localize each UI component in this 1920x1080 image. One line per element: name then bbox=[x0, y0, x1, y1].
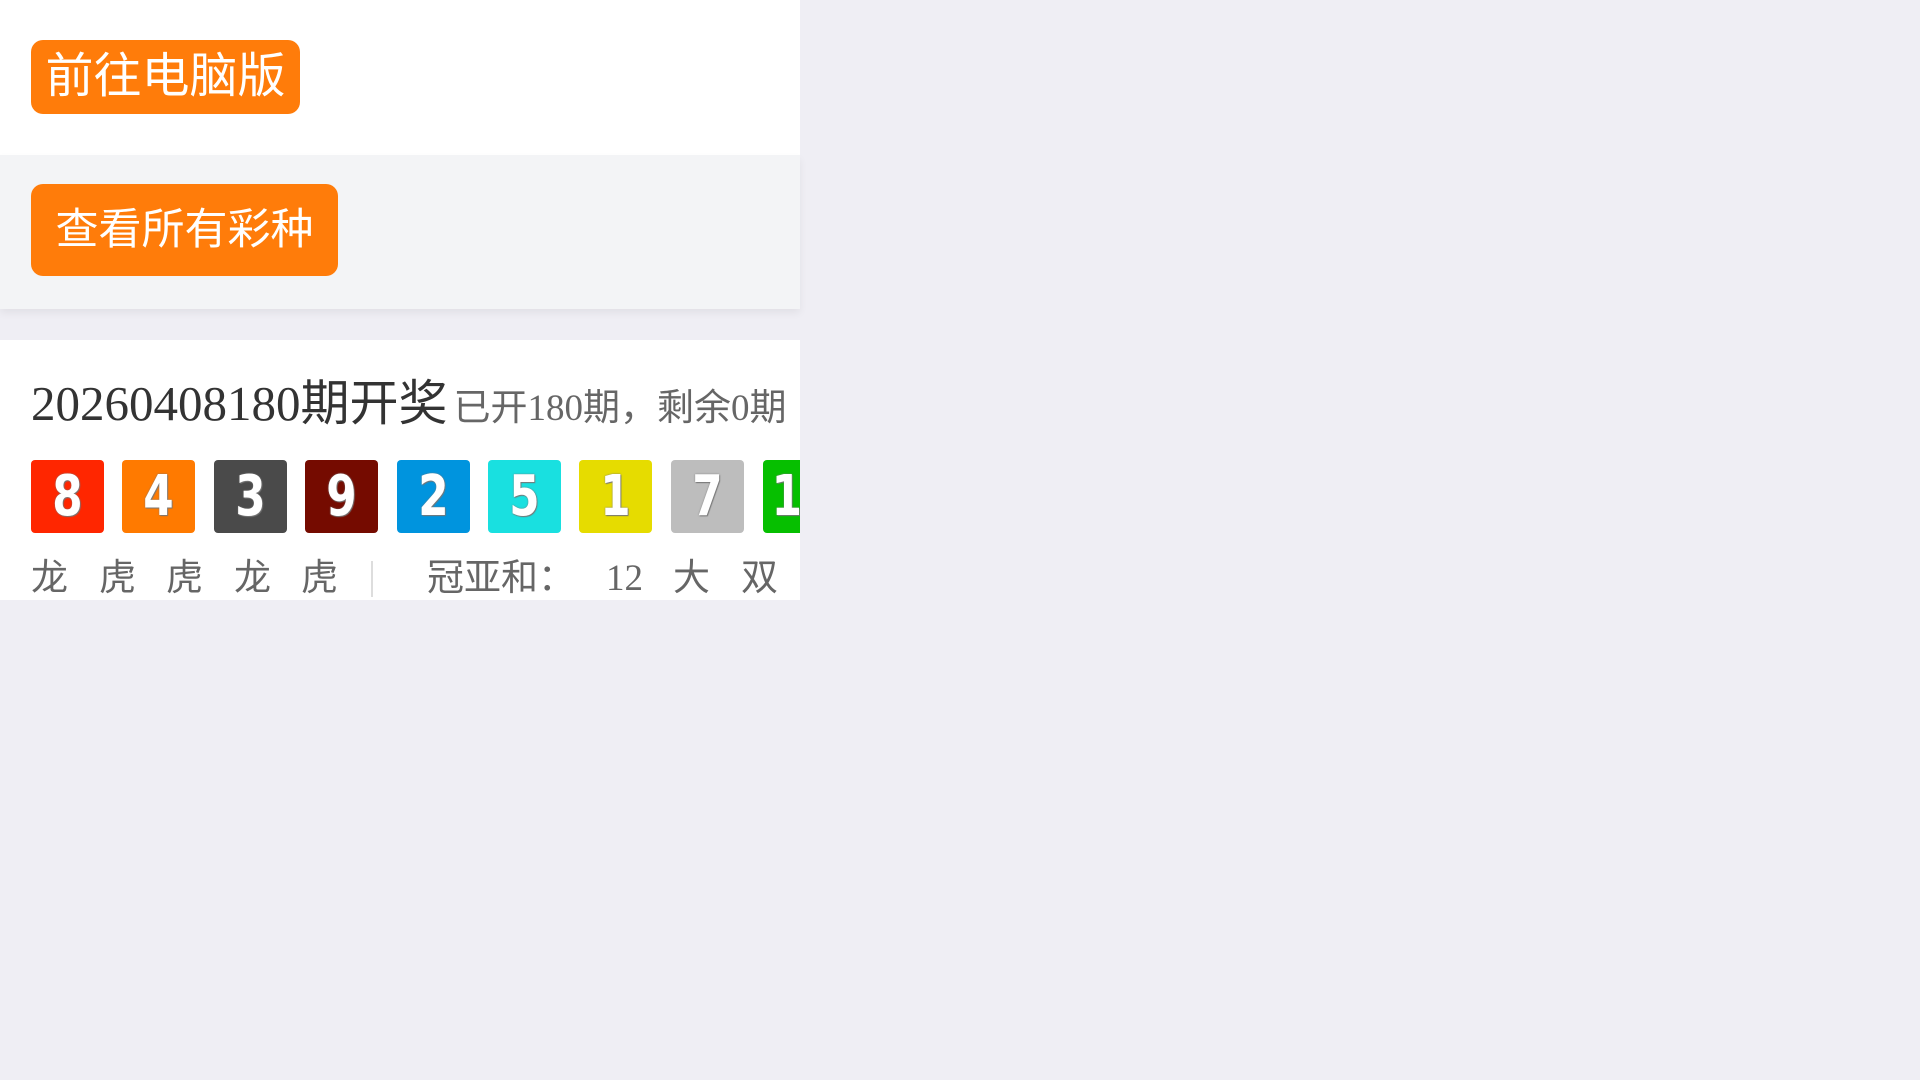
balls: 1 bbox=[600, 464, 631, 529]
stats row bbox=[31, 558, 778, 599]
balls: 4 bbox=[143, 464, 174, 529]
balls: 3 bbox=[235, 464, 266, 529]
stats row: 虎 bbox=[166, 558, 203, 599]
stats row: 虎 bbox=[301, 558, 338, 599]
panel: top white bbox=[0, 0, 800, 155]
panel: grey section bbox=[0, 155, 800, 309]
stats row: 双 bbox=[741, 558, 778, 599]
balls bbox=[31, 460, 800, 533]
stats row: 龙 bbox=[234, 558, 271, 599]
stats row: 冠亚和： bbox=[427, 558, 575, 599]
button: all lotteries bbox=[31, 184, 338, 276]
balls: 7 bbox=[692, 464, 723, 529]
balls: 8 bbox=[52, 464, 83, 529]
balls: 5 bbox=[509, 464, 540, 529]
button: desktop version bbox=[31, 40, 300, 114]
stats row: 龙 bbox=[31, 558, 68, 599]
stats row: 大 bbox=[673, 558, 710, 599]
balls: 2 bbox=[418, 464, 449, 529]
panel: result bbox=[0, 340, 800, 600]
button: all lotteries: 查看所有彩种 bbox=[56, 206, 314, 254]
button: desktop version: 前往电脑版 bbox=[45, 50, 286, 103]
stats row: 12 bbox=[606, 558, 643, 599]
balls: 9 bbox=[326, 464, 357, 529]
stats row: 虎 bbox=[99, 558, 136, 599]
title: 20260408180期开奖已开180期，剩余0期 bbox=[31, 376, 787, 431]
